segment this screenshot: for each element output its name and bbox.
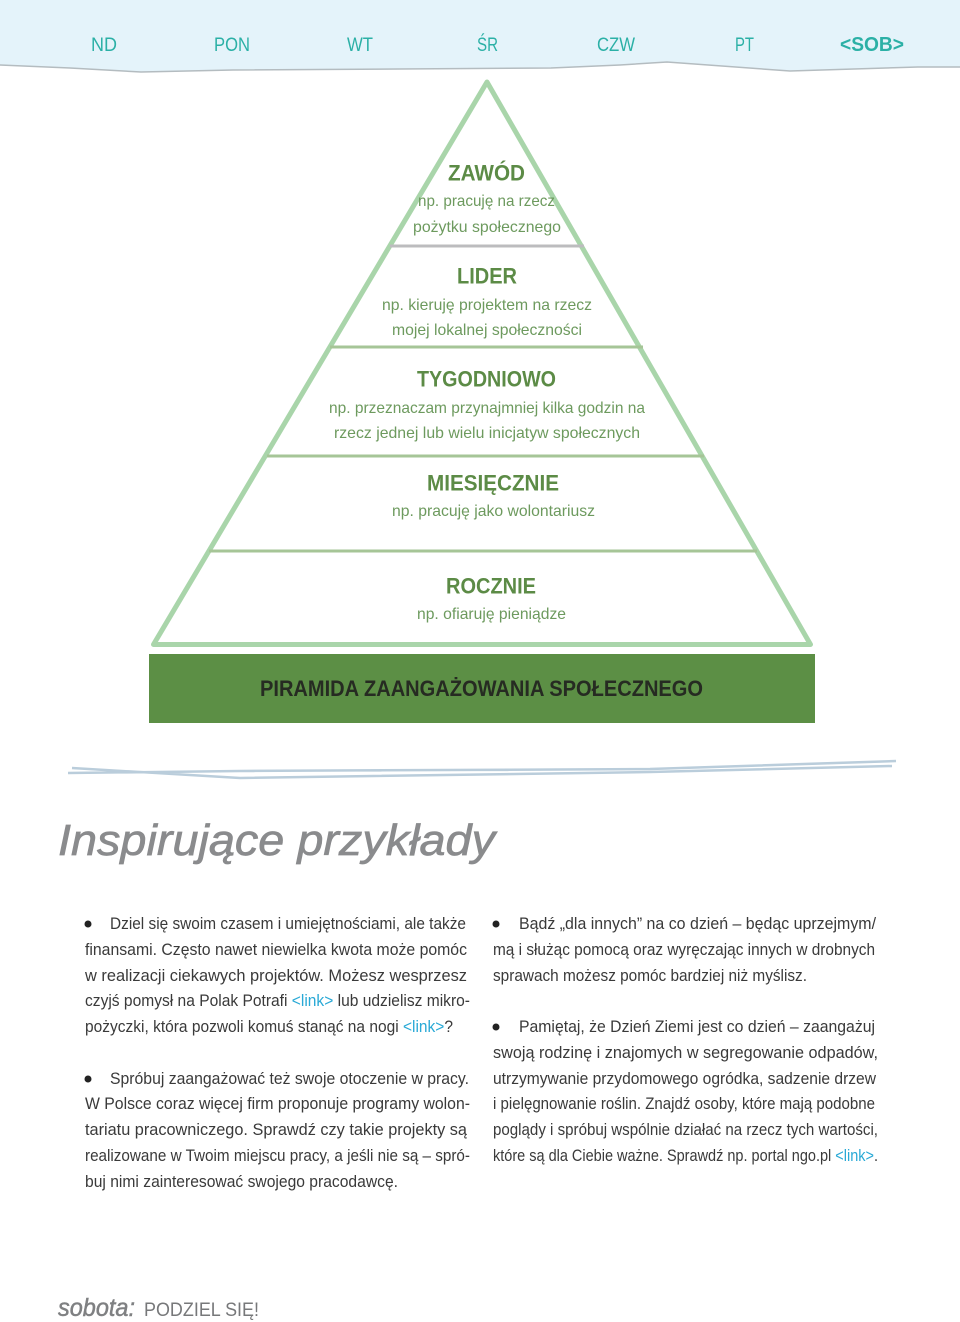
footer label: PODZIEL SIĘ! bbox=[144, 1300, 259, 1321]
weekday navigation: ŚR bbox=[477, 34, 498, 56]
pyramid level: zawód: np. pracuję na rzecz bbox=[418, 193, 555, 210]
pyramid level: tygodniowo: TYGODNIOWO bbox=[417, 366, 556, 392]
weekday navigation bbox=[91, 34, 904, 56]
left column text: W Polsce coraz więcej firm proponuje programy wolon- bbox=[85, 1095, 470, 1113]
right column text: i pielęgnowanie roślin. Znajdź osoby, które mają podobne bbox=[493, 1095, 875, 1113]
right column text: które są dla Ciebie ważne. Sprawdź np. portal ngo.pl <link>. bbox=[493, 1147, 878, 1165]
pyramid level: rocznie: ROCZNIE bbox=[446, 574, 536, 598]
weekday navigation: ND bbox=[91, 35, 117, 56]
weekday navigation: WT bbox=[347, 35, 373, 56]
weekday navigation: CZW bbox=[597, 35, 635, 56]
pyramid level: zawód: ZAWÓD bbox=[448, 160, 525, 186]
left column text: buj nimi zainteresować swojego pracodawcę. bbox=[85, 1173, 398, 1191]
pyramid level: tygodniowo: rzecz jednej lub wielu inicjatyw społecznych bbox=[334, 425, 640, 442]
pyramid level: lider: np. kieruję projektem na rzecz bbox=[382, 297, 592, 314]
right column text: mą i służąc pomocą oraz wyręczając innych w drobnych bbox=[493, 941, 875, 959]
pyramid title banner bbox=[149, 654, 815, 723]
pyramid level: rocznie: np. ofiaruję pieniądze bbox=[417, 606, 566, 623]
weekday navigation: PON bbox=[214, 35, 250, 56]
right column text: poglądy i spróbuj wspólnie działać na rzecz tych wartości, bbox=[493, 1121, 878, 1139]
left column text: realizowane w Twoim miejscu pracy, a jeśli nie są – spró- bbox=[85, 1147, 470, 1165]
left column text: finansami. Często nawet niewielka kwota może pomóc bbox=[85, 941, 467, 959]
left column text: w realizacji ciekawych projektów. Możesz wesprzesz bbox=[84, 967, 467, 985]
right column text bbox=[492, 915, 878, 1165]
pyramid level: miesięcznie: np. pracuję jako wolontariusz bbox=[392, 503, 595, 520]
left column text: tariatu pracowniczego. Sprawdź czy takie projekty są bbox=[85, 1121, 468, 1139]
header band bbox=[0, 0, 960, 72]
section heading: Inspirujące przykłady bbox=[58, 816, 498, 865]
footer label bbox=[58, 1294, 259, 1322]
pyramid title banner: PIRAMIDA ZAANGAŻOWANIA SPOŁECZNEGO bbox=[260, 676, 703, 701]
pyramid outline bbox=[154, 82, 810, 644]
pyramid level: miesięcznie: MIESIĘCZNIE bbox=[427, 470, 559, 496]
weekday navigation: PT bbox=[735, 35, 754, 56]
pyramid level: miesięcznie bbox=[392, 470, 595, 520]
pyramid level: lider bbox=[382, 264, 592, 339]
pyramid level: lider: LIDER bbox=[457, 264, 517, 288]
pyramid level: tygodniowo: np. przeznaczam przynajmniej kilka godzin na bbox=[329, 400, 645, 417]
left column text: czyjś pomysł na Polak Potrafi <link> lub udzielisz mikro- bbox=[85, 992, 470, 1010]
left column text: Spróbuj zaangażować też swoje otoczenie w pracy. bbox=[110, 1070, 469, 1088]
right column text: Bądź „dla innych” na co dzień – będąc uprzejmym/ bbox=[519, 915, 876, 933]
right column text: utrzymywanie przydomowego ogródka, sadzenie drzew bbox=[493, 1070, 876, 1088]
right column text: Pamiętaj, że Dzień Ziemi jest co dzień – zaangażuj bbox=[519, 1018, 875, 1036]
weekday navigation: <SOB> bbox=[840, 34, 904, 56]
pyramid level: zawód: pożytku społecznego bbox=[413, 219, 561, 236]
pyramid level: lider: mojej lokalnej społeczności bbox=[392, 322, 582, 339]
left column text: pożyczki, która pozwoli komuś stanąć na nogi <link>? bbox=[85, 1018, 453, 1036]
pyramid level: zawód bbox=[413, 160, 561, 236]
footer label: sobota: bbox=[58, 1294, 135, 1322]
left column text: Dziel się swoim czasem i umiejętnościami, ale także bbox=[110, 915, 466, 933]
right column text: swoją rodzinę i znajomych w segregowanie odpadów, bbox=[493, 1044, 878, 1062]
left column text bbox=[84, 915, 470, 1191]
right column text: sprawach możesz pomóc bardziej niż myślisz. bbox=[493, 967, 807, 985]
pyramid level: tygodniowo bbox=[329, 366, 645, 442]
pyramid level: rocznie bbox=[417, 574, 566, 623]
